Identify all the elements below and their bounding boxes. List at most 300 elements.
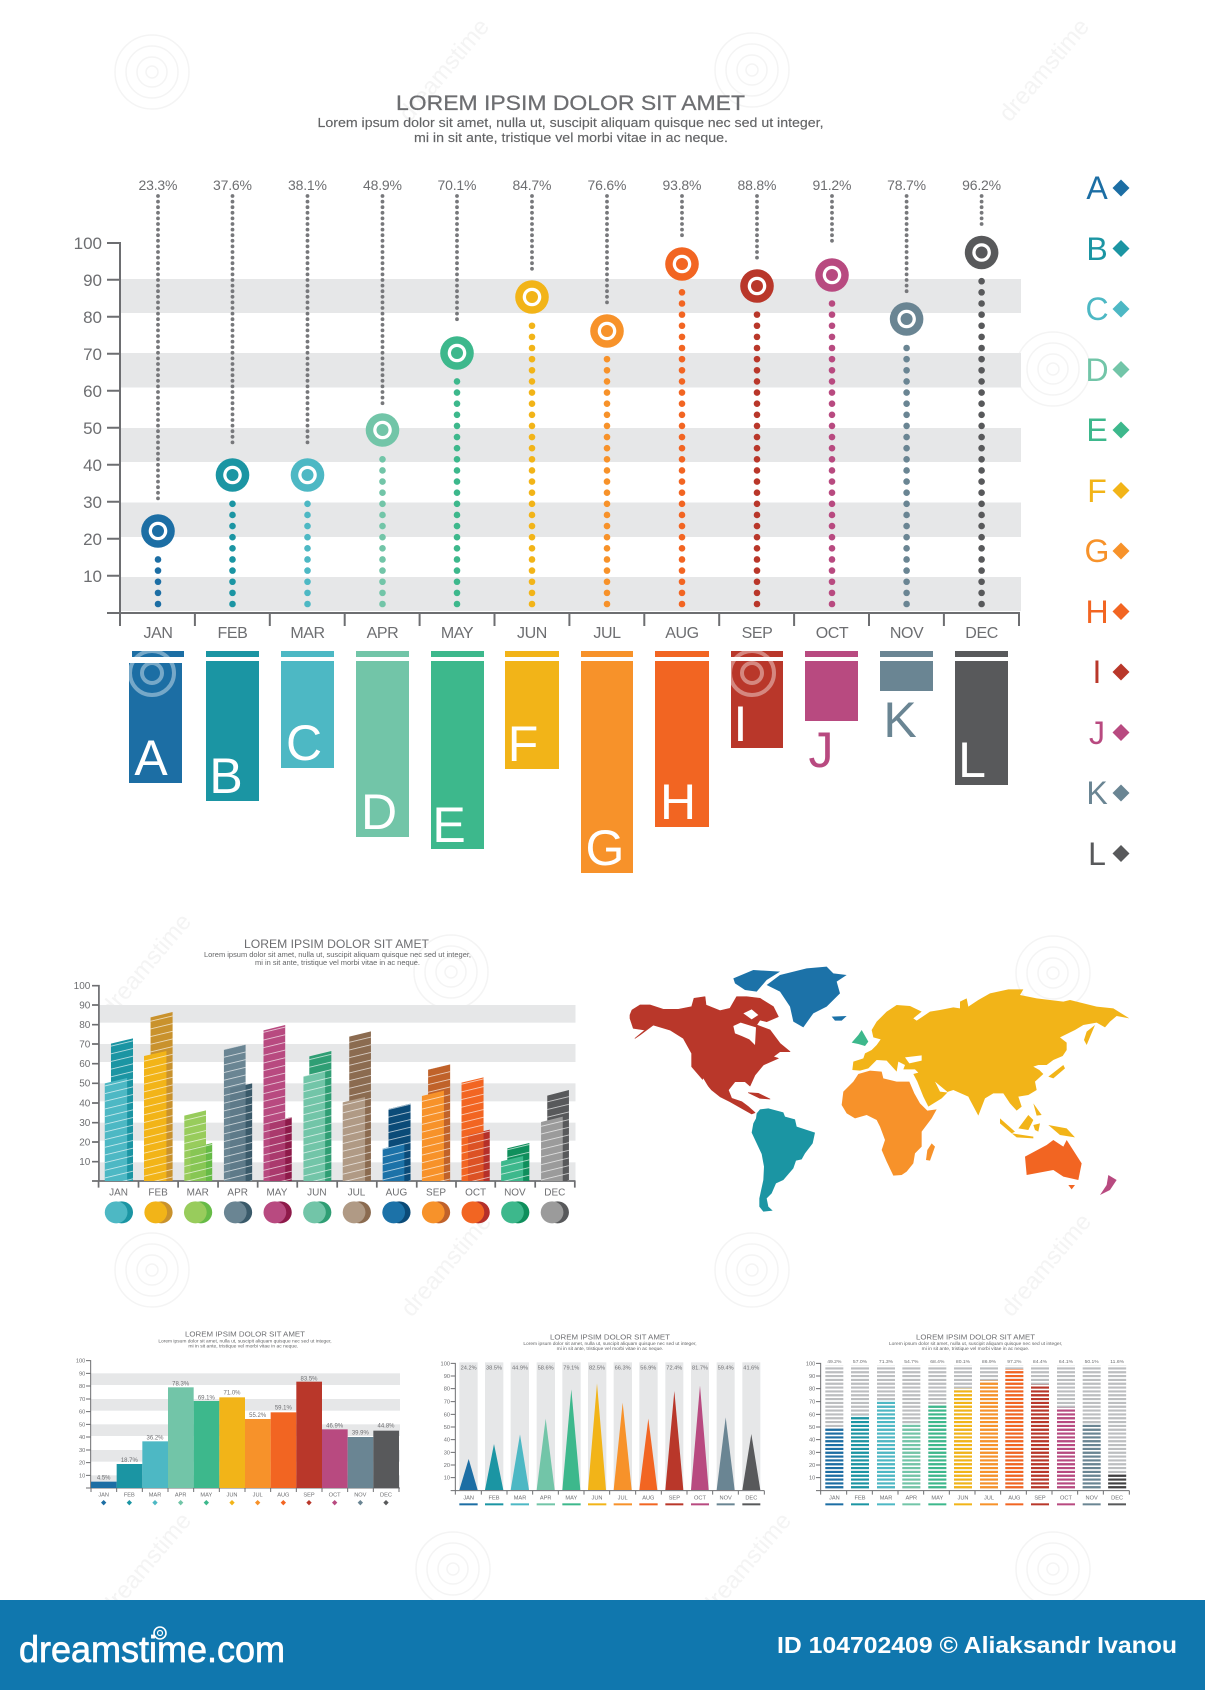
column: JUN	[515, 280, 549, 604]
month labels: SEP	[669, 1496, 680, 1502]
colour lines	[459, 1503, 760, 1505]
column: JUL	[590, 314, 624, 604]
month labels: OCT	[816, 625, 849, 642]
bar K	[880, 651, 933, 748]
value labels	[97, 1376, 395, 1482]
percent labels: 81.7%	[692, 1366, 708, 1372]
month labels: MAR	[149, 1492, 161, 1498]
percent labels: 64.1%	[1059, 1359, 1074, 1365]
value labels: 4.5%	[97, 1476, 111, 1482]
bar J	[805, 651, 858, 778]
percent labels: 50.1%	[1085, 1359, 1099, 1365]
y axis labels: 70	[83, 345, 102, 364]
colour lines	[825, 1503, 1126, 1505]
bar I	[731, 651, 783, 752]
percent labels: 59.4%	[718, 1366, 734, 1372]
legend A: A	[1086, 170, 1108, 206]
month labels: JAN	[98, 1492, 109, 1498]
month labels: OCT	[694, 1496, 707, 1502]
legend I	[1093, 654, 1130, 690]
stripes overlay	[104, 1016, 569, 1181]
percent labels: 72.4%	[666, 1366, 682, 1372]
title: LOREM IPSIM DOLOR SIT AMET	[550, 1332, 671, 1341]
credit: ID 104702409 © Aliaksandr Ivanou	[777, 1632, 1177, 1658]
percent labels: 48.9%	[363, 177, 402, 193]
bars APR	[224, 1045, 252, 1181]
month labels: OCT	[1060, 1496, 1073, 1502]
legend F	[1087, 473, 1130, 509]
month labels: MAY	[931, 1496, 943, 1502]
bar G	[581, 651, 633, 876]
y labels: 100	[441, 1361, 450, 1367]
month labels: APR	[540, 1496, 551, 1502]
Hudson Bay gap	[702, 995, 758, 1092]
y axis and x axis	[107, 243, 1020, 626]
y labels: 20	[809, 1463, 815, 1469]
percent labels: 91.2%	[812, 177, 852, 193]
grey stripes	[834, 1365, 1117, 1488]
month labels: AUG	[665, 625, 699, 642]
y labels: 50	[809, 1425, 815, 1431]
y labels	[76, 1359, 85, 1479]
percent labels: 78.7%	[887, 177, 926, 193]
bars OCT	[462, 1077, 490, 1181]
month labels: JAN	[463, 1496, 474, 1502]
percent labels: 70.1%	[438, 177, 476, 193]
bar C: C	[286, 715, 322, 771]
legend B	[1086, 231, 1130, 267]
y axis labels: 40	[83, 456, 102, 475]
month labels: FEB	[488, 1496, 500, 1502]
legend F: F	[1087, 473, 1107, 509]
y axis labels: 100	[74, 234, 102, 253]
value labels: 36.2%	[147, 1435, 164, 1441]
Eurasia	[852, 989, 1129, 1138]
bar G: G	[586, 820, 624, 876]
bar H: H	[660, 774, 696, 830]
middle chart subtitle: Lorem ipsum dolor sit amet, nulla ut, suscipit aliquam quisque nec sed ut integer,	[204, 950, 471, 959]
legend K: K	[1086, 775, 1108, 811]
value labels: 71.0%	[224, 1391, 241, 1397]
percent labels: 41.6%	[743, 1366, 759, 1372]
y labels: 70	[79, 1397, 85, 1403]
footer banner	[0, 1600, 1205, 1690]
percent labels: 79.1%	[563, 1366, 579, 1372]
month labels: JUL	[984, 1496, 994, 1502]
y labels: 90	[79, 1000, 91, 1011]
title: LOREM IPSIM DOLOR SIT AMET	[185, 1330, 306, 1339]
month labels: FEB	[854, 1496, 866, 1502]
month labels: MAR	[290, 625, 325, 642]
bar J: J	[808, 722, 834, 778]
percent labels: 97.2%	[1007, 1359, 1022, 1365]
percent labels: 76.6%	[588, 177, 626, 193]
y labels	[441, 1361, 450, 1482]
bar E: E	[432, 797, 466, 853]
watermark spirals and text: dreamstime	[394, 13, 495, 127]
percent labels: 37.6%	[213, 177, 252, 193]
South America	[752, 1108, 815, 1212]
month labels: APR	[175, 1492, 186, 1498]
bar B	[206, 651, 259, 804]
y labels: 60	[444, 1412, 450, 1418]
y axis labels: 20	[83, 530, 102, 549]
watermark spirals and text: dreamstime	[994, 13, 1095, 127]
month labels: DEC	[965, 625, 998, 642]
bars DEC	[541, 1090, 569, 1181]
percent labels: 49.2%	[827, 1359, 842, 1365]
column: OCT	[815, 258, 849, 604]
month labels: NOV	[720, 1496, 732, 1502]
y labels: 50	[444, 1425, 450, 1431]
percent labels: 93.8%	[662, 177, 702, 193]
month labels: JUL	[348, 1187, 366, 1198]
Africa	[842, 1071, 937, 1176]
legend H: H	[1085, 594, 1109, 630]
y labels: 80	[809, 1387, 815, 1393]
month labels: JUL	[253, 1492, 263, 1498]
North America	[630, 997, 790, 1114]
watermark spirals and text: dreamstime	[696, 1507, 797, 1621]
bars JUN	[303, 1051, 331, 1181]
y labels: 90	[444, 1374, 450, 1380]
y labels: 90	[79, 1371, 85, 1377]
y axis labels	[74, 234, 102, 586]
bar B: B	[209, 748, 243, 804]
triangles	[459, 1383, 760, 1490]
hanging letter bars	[129, 651, 1008, 876]
month labels	[463, 1496, 757, 1502]
legend L: L	[1088, 836, 1106, 872]
y labels	[806, 1361, 815, 1482]
title: LOREM IPSIM DOLOR SIT AMET	[396, 92, 745, 115]
bar L: L	[958, 732, 986, 788]
y labels: 80	[444, 1387, 450, 1393]
triangle chart	[441, 1332, 764, 1505]
legend I: I	[1093, 654, 1101, 690]
percent labels: 38.1%	[288, 177, 327, 193]
y labels: 80	[79, 1020, 91, 1031]
percent labels: 86.9%	[982, 1359, 997, 1365]
month labels: AUG	[386, 1187, 407, 1198]
month labels: AUG	[1008, 1496, 1020, 1502]
month labels: JAN	[109, 1187, 128, 1198]
percent labels: 82.5%	[589, 1366, 605, 1372]
percent labels: 24.2%	[461, 1366, 477, 1372]
axes	[451, 1363, 764, 1495]
month labels: MAY	[200, 1492, 212, 1498]
y labels: 10	[79, 1473, 85, 1479]
month labels: DEC	[544, 1187, 565, 1198]
y labels: 100	[76, 1359, 85, 1365]
legend L	[1088, 836, 1130, 872]
y labels: 20	[79, 1461, 85, 1467]
column: SEP	[740, 269, 774, 604]
legend G: G	[1085, 533, 1109, 569]
subtitle	[318, 116, 824, 145]
y labels: 30	[79, 1118, 91, 1129]
percent labels: 88.8%	[738, 177, 776, 193]
month labels: SEP	[303, 1492, 315, 1498]
month labels: MAR	[514, 1496, 526, 1502]
legend K	[1086, 775, 1130, 811]
y labels: 60	[79, 1059, 91, 1070]
month labels: MAY	[565, 1496, 577, 1502]
subtitle: Lorem ipsum dolor sit amet, nulla ut, suscipit aliquam quisque nec sed ut integer,	[523, 1341, 697, 1346]
Australia	[1025, 1140, 1082, 1189]
axes	[86, 1361, 400, 1492]
y labels: 50	[79, 1422, 85, 1428]
bar L	[955, 651, 1008, 788]
y labels: 60	[79, 1410, 85, 1416]
subtitle: Lorem ipsum dolor sit amet, nulla ut, suscipit aliquam quisque nec sed ut integer,	[889, 1341, 1062, 1346]
subtitle: Lorem ipsum dolor sit amet, nulla ut, suscipit aliquam quisque nec sed ut integer,	[158, 1338, 332, 1343]
percent labels: 54.7%	[904, 1359, 919, 1365]
subtitle	[889, 1341, 1062, 1351]
y labels: 90	[809, 1374, 815, 1380]
bar I: I	[734, 696, 747, 752]
percent labels: 57.0%	[853, 1359, 868, 1365]
bars AUG	[383, 1104, 411, 1181]
middle chart subtitle	[204, 950, 471, 967]
subtitle: mi in sit ante, tristique vel morbi vitae in ac neque.	[557, 1346, 663, 1351]
month labels	[98, 1492, 392, 1498]
background bands	[120, 279, 1021, 611]
bar A: A	[134, 730, 168, 786]
value labels: 78.3%	[172, 1381, 190, 1387]
month labels	[143, 625, 998, 642]
y axis labels: 30	[83, 493, 102, 512]
watermark spirals and text: dreamstime	[96, 908, 197, 1022]
inland seas	[905, 1055, 948, 1093]
month labels: AUG	[642, 1496, 654, 1502]
month labels: APR	[367, 625, 398, 642]
value labels: 69.1%	[198, 1395, 215, 1401]
y labels: 30	[809, 1450, 815, 1456]
month labels: AUG	[277, 1492, 289, 1498]
y labels: 10	[79, 1157, 91, 1168]
Greenland and Baffin	[733, 967, 847, 1027]
y labels: 80	[79, 1384, 85, 1390]
legend G	[1085, 533, 1130, 569]
month labels: NOV	[1086, 1496, 1098, 1502]
bars JAN	[105, 1038, 133, 1181]
column: MAY	[440, 336, 474, 604]
bars SEP	[422, 1064, 450, 1181]
percent labels: 71.3%	[879, 1359, 894, 1365]
value labels: 39.9%	[352, 1431, 369, 1437]
y labels: 70	[79, 1039, 91, 1050]
subtitle: mi in sit ante, tristique vel morbi vitae in ac neque.	[188, 1343, 298, 1348]
y labels: 60	[809, 1412, 815, 1418]
column: NOV	[890, 302, 923, 604]
percent labels: 44.9%	[512, 1366, 528, 1372]
bars MAR	[184, 1110, 212, 1181]
percent labels	[827, 1359, 1125, 1365]
bars JUL	[343, 1031, 371, 1181]
y labels: 40	[79, 1098, 91, 1109]
percent labels: 38.5%	[486, 1366, 502, 1372]
y axis labels: 80	[83, 308, 102, 327]
month labels: NOV	[504, 1187, 526, 1198]
grey dotted lines	[158, 196, 982, 502]
y labels: 40	[444, 1438, 450, 1444]
column: AUG	[665, 247, 699, 604]
percent labels: 84.4%	[1033, 1359, 1048, 1365]
y labels: 40	[809, 1438, 815, 1444]
percent labels: 56.9%	[640, 1366, 656, 1372]
month labels: MAR	[187, 1187, 209, 1198]
month labels: DEC	[380, 1492, 392, 1498]
percent labels: 84.7%	[512, 177, 552, 193]
percent labels: 96.2%	[962, 177, 1001, 193]
percent labels	[461, 1366, 759, 1372]
percent labels: 68.4%	[930, 1359, 945, 1365]
column: MAR	[291, 458, 324, 604]
month labels: OCT	[465, 1187, 486, 1198]
legend D: D	[1085, 352, 1109, 388]
bars MAY	[264, 1025, 292, 1181]
value labels: 18.7%	[121, 1458, 138, 1464]
month labels: SEP	[426, 1187, 446, 1198]
y labels: 70	[809, 1400, 815, 1406]
coloured stripes	[834, 1369, 1117, 1488]
legend D	[1085, 352, 1130, 388]
month labels: NOV	[354, 1492, 367, 1498]
y labels: 100	[74, 981, 91, 992]
month labels: MAY	[267, 1187, 288, 1198]
bar C	[281, 651, 334, 771]
y labels: 100	[806, 1361, 815, 1367]
title: LOREM IPSIM DOLOR SIT AMET	[916, 1332, 1036, 1341]
percent labels	[138, 177, 1001, 193]
New Zealand	[1100, 1175, 1117, 1195]
y labels: 20	[444, 1463, 450, 1469]
month labels: JUL	[593, 625, 621, 642]
legend A	[1086, 170, 1130, 206]
y labels: 30	[444, 1450, 450, 1456]
bar H	[655, 651, 709, 830]
UK	[852, 1030, 868, 1046]
percent labels: 23.3%	[138, 177, 178, 193]
month labels	[829, 1496, 1123, 1502]
legend B: B	[1086, 231, 1108, 267]
y axis labels: 50	[83, 419, 102, 438]
y axis labels: 90	[83, 271, 102, 290]
month labels	[109, 1187, 565, 1198]
legend circles	[105, 1201, 569, 1223]
value labels: 59.1%	[275, 1405, 292, 1411]
month labels: APR	[227, 1187, 248, 1198]
bar K: K	[883, 692, 917, 748]
world map	[630, 967, 1129, 1212]
watermark spirals and text: dreamstime	[96, 1507, 197, 1621]
legend J: J	[1089, 715, 1105, 751]
percent labels: 58.6%	[538, 1366, 554, 1372]
middle chart title: LOREM IPSIM DOLOR SIT AMET	[244, 939, 429, 951]
value labels: 44.8%	[378, 1424, 395, 1430]
legend E: E	[1086, 412, 1108, 448]
axes	[816, 1363, 1129, 1495]
subtitle: mi in sit ante, tristique vel morbi vitae in ac neque.	[414, 131, 728, 145]
month labels: JUN	[591, 1496, 602, 1502]
month labels: SEP	[1034, 1496, 1046, 1502]
y axis labels: 10	[83, 567, 102, 586]
column: FEB	[216, 458, 249, 604]
stacked striped bar chart	[74, 981, 577, 1223]
y labels: 70	[444, 1400, 450, 1406]
month labels: FEB	[124, 1492, 135, 1498]
striped level chart	[806, 1332, 1129, 1505]
column: JAN	[141, 514, 175, 604]
month labels: APR	[906, 1496, 917, 1502]
y labels: 30	[79, 1448, 85, 1454]
subtitle: Lorem ipsum dolor sit amet, nulla ut, suscipit aliquam quisque nec sed ut integer,	[318, 116, 824, 130]
value labels: 55.2%	[249, 1413, 267, 1419]
month labels: MAY	[441, 625, 474, 642]
bar F: F	[508, 716, 538, 772]
bar D: D	[361, 784, 397, 840]
column: DEC	[965, 236, 998, 604]
legend J	[1089, 715, 1130, 751]
diamonds	[101, 1500, 389, 1505]
percent labels: 80.1%	[956, 1359, 971, 1365]
month labels: FEB	[148, 1187, 168, 1198]
month labels: JUN	[957, 1496, 968, 1502]
month labels: DEC	[745, 1496, 757, 1502]
bands	[91, 1373, 400, 1487]
bars FEB	[144, 1012, 173, 1181]
bar F	[505, 651, 559, 772]
white watermark over bars	[130, 651, 774, 695]
bands	[99, 1005, 575, 1180]
legend C	[1085, 291, 1130, 327]
subtitle	[523, 1341, 697, 1351]
month labels: JUL	[618, 1496, 628, 1502]
bar E	[431, 651, 484, 853]
small bar chart	[76, 1330, 400, 1505]
month labels: JUN	[226, 1492, 237, 1498]
value labels: 46.9%	[326, 1423, 344, 1429]
month labels: NOV	[890, 625, 924, 642]
month labels: DEC	[1111, 1496, 1123, 1502]
month labels: JAN	[143, 625, 173, 642]
legend C: C	[1085, 291, 1109, 327]
bar A	[129, 651, 184, 786]
logo: dreamstime.com	[19, 1629, 285, 1670]
column: APR	[366, 413, 399, 604]
watermark spirals and text: dreamstime	[996, 1208, 1097, 1322]
y labels: 20	[79, 1137, 91, 1148]
value labels: 83.5%	[301, 1376, 318, 1382]
bars NOV	[501, 1143, 529, 1181]
subtitle	[158, 1338, 332, 1348]
legend	[1085, 170, 1130, 872]
legend H	[1085, 594, 1130, 630]
month labels: JUN	[307, 1187, 327, 1198]
watermark spirals and text	[96, 13, 1097, 1621]
percent labels: 66.3%	[615, 1366, 631, 1372]
legend E	[1086, 412, 1130, 448]
bars	[91, 1382, 399, 1488]
y axis labels: 60	[83, 382, 102, 401]
y labels	[74, 981, 91, 1168]
axes	[92, 986, 575, 1188]
month labels: OCT	[329, 1492, 341, 1498]
watermark spirals and text: dreamstime	[396, 1208, 497, 1322]
month labels: JUN	[517, 625, 547, 642]
y labels: 40	[79, 1435, 85, 1441]
